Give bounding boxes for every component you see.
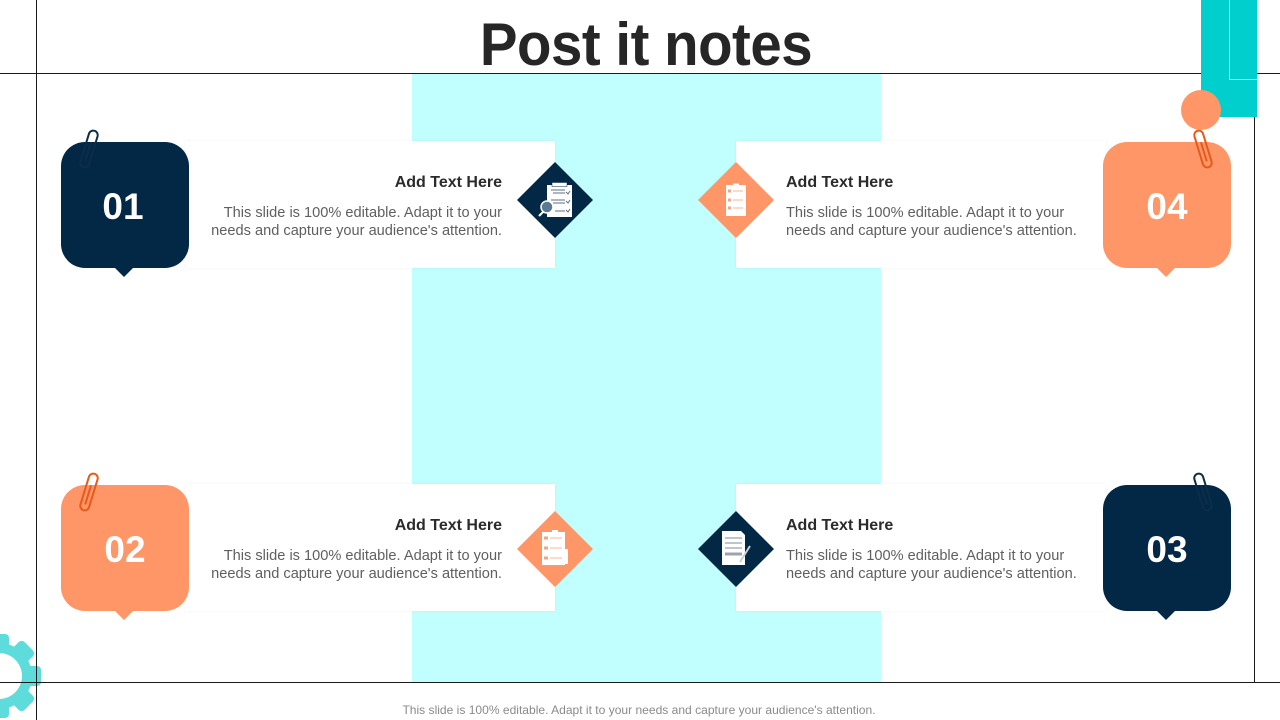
card 03	[698, 472, 1231, 620]
number note	[1103, 485, 1231, 611]
orange circle	[1181, 90, 1221, 130]
diamond icon	[698, 511, 774, 587]
heading: Add Text Here	[786, 174, 893, 191]
body text	[211, 205, 502, 239]
body text: This slide is 100% editable. Adapt it to your	[786, 548, 1064, 564]
card 04	[698, 141, 1231, 277]
card 02	[61, 472, 593, 620]
central cyan band	[412, 74, 881, 683]
card panel	[736, 484, 1106, 611]
diamond icon	[517, 162, 593, 238]
diamond icon	[698, 162, 774, 238]
paperclip 04	[1193, 130, 1213, 168]
paperclip	[1193, 472, 1212, 511]
card panel	[736, 141, 1106, 268]
number note: 01	[102, 186, 144, 227]
card panel	[185, 484, 555, 611]
paperclip	[79, 472, 99, 512]
body text: This slide is 100% editable. Adapt it to your	[224, 548, 502, 564]
number note	[61, 142, 189, 268]
body text: needs and capture your audience's attention.	[211, 223, 502, 239]
number note	[1103, 142, 1231, 268]
number note: 02	[104, 529, 146, 570]
icon: gear	[0, 634, 41, 718]
heading: Add Text Here	[786, 517, 893, 534]
number note	[61, 485, 189, 611]
number note: 04	[1146, 186, 1188, 227]
card 01	[61, 130, 593, 277]
body text: This slide is 100% editable. Adapt it to your	[224, 205, 502, 221]
body text: needs and capture your audience's attention.	[786, 223, 1077, 239]
body text: This slide is 100% editable. Adapt it to your	[786, 205, 1064, 221]
heading: Add Text Here	[395, 174, 502, 191]
card panel	[185, 141, 555, 268]
footer note: This slide is 100% editable. Adapt it to your needs and capture your audience's attention.	[402, 703, 876, 717]
diamond icon	[517, 511, 593, 587]
top right teal accent	[1201, 0, 1257, 117]
body text	[211, 548, 502, 582]
number note: 03	[1146, 529, 1188, 570]
body text: needs and capture your audience's attention.	[211, 566, 502, 582]
body text: needs and capture your audience's attention.	[786, 566, 1077, 582]
body text	[786, 205, 1077, 239]
heading: Add Text Here	[395, 517, 502, 534]
paperclip	[80, 130, 99, 168]
body text	[786, 548, 1077, 582]
title: Post it notes	[480, 11, 812, 78]
